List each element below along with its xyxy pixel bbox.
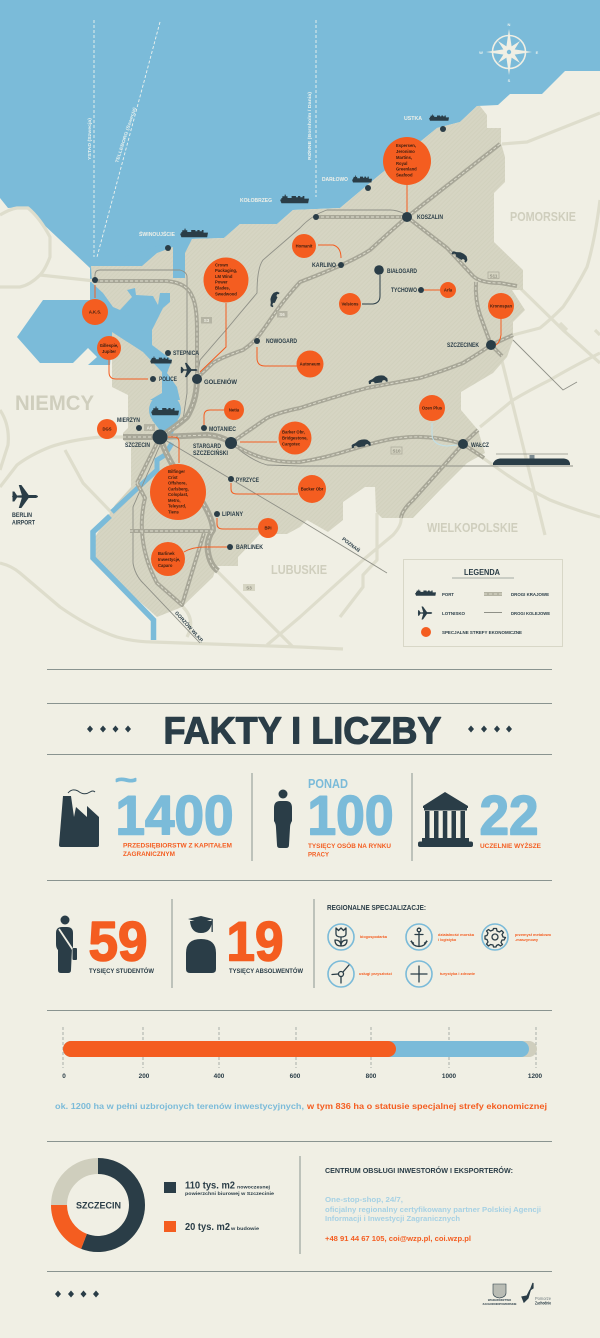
legend: LEGENDA [464, 568, 500, 577]
icon: cross [406, 961, 432, 987]
axis labels: 0 [62, 1073, 66, 1080]
title diamonds [87, 726, 512, 732]
regional specializations [327, 903, 552, 987]
logo: voivodeship: WOJEWÓDZTWO [488, 1297, 512, 1302]
stat: companies: ~ [115, 766, 137, 794]
icons: airplanes [12, 363, 198, 508]
sea lane labels: YSTAD (Szwecja) [87, 117, 92, 160]
city labels: NOWOGARD [266, 338, 297, 345]
stat: universities [418, 784, 542, 850]
axis labels: 1000 [442, 1073, 457, 1080]
donut chart: SZCZECIN [76, 1200, 121, 1212]
compass: W [479, 50, 483, 55]
companies: Bilfinger [168, 469, 185, 474]
icon: gear [482, 924, 508, 950]
companies: Packaging, [215, 268, 237, 273]
companies: BPI [265, 526, 271, 530]
logo: voivodeship [482, 1284, 517, 1306]
region names: NIEMCY [15, 392, 94, 415]
donut legend: 20 tys. m2 [185, 1222, 230, 1233]
companies: Martins, [396, 155, 412, 160]
icon: future services [328, 961, 354, 987]
icon: person [274, 790, 292, 848]
bar [63, 1041, 537, 1057]
section rules [47, 670, 552, 1272]
airport label: AIRPORT [12, 520, 35, 526]
compass: S [508, 78, 511, 83]
contact block: One-stop-shop, 24/7, [325, 1195, 403, 1204]
city labels: MIERZYN [117, 417, 140, 424]
stat: students: TYSIĘCY STUDENTÓW [89, 966, 155, 975]
city labels: SZCZECINEK [447, 342, 479, 349]
companies: Crist [168, 475, 178, 480]
legend: DROGI KRAJOWE [511, 592, 549, 597]
companies: Velsions [342, 302, 359, 306]
stat: workforce [274, 777, 394, 858]
icon: graduate [186, 916, 216, 973]
stat: universities: UCZELNIE WYŻSZE [480, 842, 542, 850]
regional specializations: REGIONALNE SPECJALIZACJE: [327, 903, 426, 912]
logo: voivodeship: ZACHODNIOPOMORSKIE [482, 1302, 517, 1306]
dividers [172, 773, 412, 1254]
sea lane labels [87, 91, 312, 163]
economic zone [91, 106, 525, 617]
specialization labels: przemysł metalowo [515, 933, 552, 937]
legend: DROGI KOLEJOWE [511, 611, 550, 616]
axis labels: 1200 [528, 1073, 543, 1080]
specialization labels: turystyka i zdrowie [440, 972, 475, 976]
sea lanes [94, 20, 316, 257]
bar chart [62, 1027, 543, 1080]
contact block: CENTRUM OBSŁUGI INWESTORÓW I EKSPORTERÓW: [325, 1166, 513, 1175]
city labels: LIPIANY [222, 511, 244, 518]
companies: Power [215, 280, 228, 285]
city labels: STEPNICA [173, 350, 199, 357]
companies: Inwestycje, [158, 557, 180, 562]
bar caption: ok. 1200 ha w pełni uzbrojonych terenów inwestycyjnych, [55, 1101, 304, 1111]
region names: LUBUSKIE [271, 562, 327, 577]
contact block: +48 91 44 67 105, coi@wzp.pl, coi.wzp.pl [325, 1234, 471, 1243]
region names [15, 209, 576, 577]
railway lines [95, 210, 577, 643]
donut legend: w budowie [230, 1226, 259, 1232]
icon: factory [59, 790, 99, 847]
ports: DARŁOWO [322, 177, 348, 183]
axis labels: 400 [214, 1073, 225, 1080]
airport label [12, 512, 35, 526]
map [0, 0, 600, 649]
companies: Cargotec [282, 442, 301, 446]
companies: Seafood [396, 172, 413, 178]
city labels: BARLINEK [236, 544, 263, 551]
icons: cars [267, 248, 469, 448]
region names: WIELKOPOLSKIE [427, 520, 518, 535]
ports [139, 114, 449, 415]
companies: Crown [215, 262, 228, 268]
stat: graduates: 19 [226, 910, 284, 972]
ports: KOŁOBRZEG [240, 198, 272, 204]
stat: students [56, 910, 155, 975]
region names: POMORSKIE [510, 209, 576, 224]
companies: Greenland [396, 166, 417, 172]
companies: Gillespie, [100, 343, 118, 348]
companies: Espersen, [396, 143, 416, 148]
sea lane labels: TELLEBORG (Szwecja) [114, 106, 137, 163]
stat: workforce: PRACY [308, 852, 330, 858]
road number signs: S3 [246, 586, 252, 590]
icon: train [493, 454, 570, 465]
companies: Teleyard, [168, 504, 186, 509]
companies: Barlinek [158, 551, 175, 556]
companies: Offshore, [168, 480, 187, 486]
companies: Caparo [158, 563, 173, 568]
river and lake [93, 330, 181, 640]
stat: graduates [186, 910, 304, 975]
city labels: SZCZECIŃSKI [193, 449, 228, 457]
stat: universities: 22 [480, 784, 538, 846]
icon: tulip [328, 924, 354, 950]
companies: Metro, [168, 498, 181, 503]
grid lines [63, 1027, 536, 1068]
city labels: WAŁCZ [471, 442, 489, 449]
compass: E [536, 50, 539, 55]
city dots [92, 126, 496, 550]
companies: Coloplast, [168, 492, 188, 497]
companies: DGS [102, 426, 112, 432]
specialization labels: usługi przyszłości [359, 972, 392, 976]
sea [0, 0, 600, 268]
companies: Autoneum [300, 362, 321, 366]
city labels: KOSZALIN [417, 214, 443, 221]
companies: Barker Obr, [282, 430, 305, 434]
city labels: POZNAŃ [340, 535, 362, 554]
stat: companies: 1400 [116, 784, 234, 846]
lagoon [17, 240, 185, 365]
city labels: KARLINO [312, 262, 336, 269]
donut chart [59, 1166, 137, 1244]
city labels: PYRZYCE [236, 477, 259, 484]
bar caption: w tym 836 ha o statusie specjalnej strefy ekonomicznej [306, 1101, 547, 1111]
companies: A.K.S. [89, 310, 101, 314]
stat: workforce: 100 [308, 784, 394, 846]
ports: USTKA [404, 116, 422, 122]
road number signs: S6 [279, 312, 285, 317]
donut legend: 110 tys. m2 [185, 1180, 235, 1192]
legend: PORT [442, 592, 454, 597]
companies: Ozen Plus [422, 406, 443, 410]
contact block: oficjalny regionalny certyfikowany partner Polskiej Agencji [325, 1205, 541, 1214]
companies: Arla [444, 288, 453, 292]
specialization labels: działalność morska [438, 933, 475, 937]
stat: workforce: PONAD [308, 777, 348, 791]
companies: Backer Obr [301, 486, 324, 492]
airport label: BERLIN [12, 512, 32, 519]
companies [82, 137, 514, 576]
contact block [325, 1166, 541, 1243]
light roads outside the region [0, 113, 600, 649]
road number signs: S11 [490, 273, 498, 278]
axis labels: 200 [139, 1073, 150, 1080]
road number signs: S10 [392, 448, 401, 454]
ports: ŚWINOUJŚCIE [139, 231, 175, 238]
bar caption [55, 1101, 547, 1111]
icon: student [56, 916, 77, 973]
stat: companies [59, 766, 234, 858]
road number signs [144, 272, 499, 591]
donut legend [164, 1180, 274, 1233]
specialization labels: biogospodarka [360, 935, 388, 939]
companies: Carlsberg, [168, 486, 189, 491]
city labels: BIAŁOGARD [387, 268, 417, 275]
companies: Jeronimo [396, 149, 415, 154]
stat: students: 59 [88, 910, 148, 972]
specialization labels: i logistyka [438, 938, 457, 942]
companies: Jupiter [102, 349, 116, 354]
axis labels: 600 [290, 1073, 301, 1080]
companies: Royal [396, 161, 407, 166]
specialization labels: -maszynowy [515, 938, 539, 942]
stat: graduates: TYSIĘCY ABSOLWENTÓW [229, 966, 304, 975]
city labels: POLICE [159, 376, 177, 383]
stat: companies: PRZEDSIĘBIORSTW Z KAPITAŁEM [123, 842, 232, 850]
city labels: SZCZECIN [125, 442, 150, 449]
sea lane labels: RØNNE (Bornholm / Dania) [307, 91, 312, 160]
companies: Netia [229, 408, 240, 412]
logo: Pomorze Zachodnie: Zachodnie [535, 1300, 551, 1306]
companies: Bridgestone, [282, 436, 308, 440]
companies: LM Wind [215, 274, 233, 279]
city labels: GORZÓW WLKP. [173, 609, 206, 645]
footer diamonds [55, 1290, 99, 1298]
donut legend: powierzchni biurowej w Szczecinie [185, 1191, 274, 1197]
companies: Swedwood [215, 292, 237, 296]
city labels: STARGARD [193, 443, 221, 450]
logo: Pomorze Zachodnie: Pomorze [535, 1296, 551, 1301]
stat: workforce: TYSIĘCY OSÓB NA RYNKU [308, 841, 391, 850]
city labels: TYCHOWO [391, 287, 417, 294]
road number signs: S3 [204, 318, 210, 323]
compass: N [508, 22, 511, 27]
legend: LOTNISKO [442, 611, 466, 616]
legend: SPECJALNE STREFY EKONOMICZNE [442, 630, 522, 635]
icon: anchor [406, 924, 432, 950]
companies: Kronospan [490, 304, 512, 308]
companies: Homanit [296, 244, 313, 248]
connectors [95, 185, 501, 552]
donut legend: nowoczesnej [237, 1184, 270, 1190]
companies: Blades, [215, 286, 230, 290]
main roads [95, 144, 517, 605]
compass [479, 22, 539, 83]
legend [404, 560, 562, 646]
title: FAKTY I LICZBY [164, 710, 442, 752]
stat: companies: ZAGRANICZNYM [123, 851, 175, 858]
contact block: Informacji i Inwestycji Zagranicznych [325, 1214, 460, 1223]
specialization labels [359, 933, 552, 976]
road number signs: A6 [147, 426, 153, 430]
axis labels: 800 [366, 1073, 377, 1080]
icon: university building [418, 792, 473, 847]
city labels [117, 214, 489, 645]
city labels: GOLENIÓW [204, 378, 237, 386]
city labels: MOTANIEC [209, 426, 236, 433]
logo: Pomorze Zachodnie [522, 1283, 551, 1306]
companies: Tiens [168, 510, 180, 514]
axis labels [62, 1073, 543, 1080]
